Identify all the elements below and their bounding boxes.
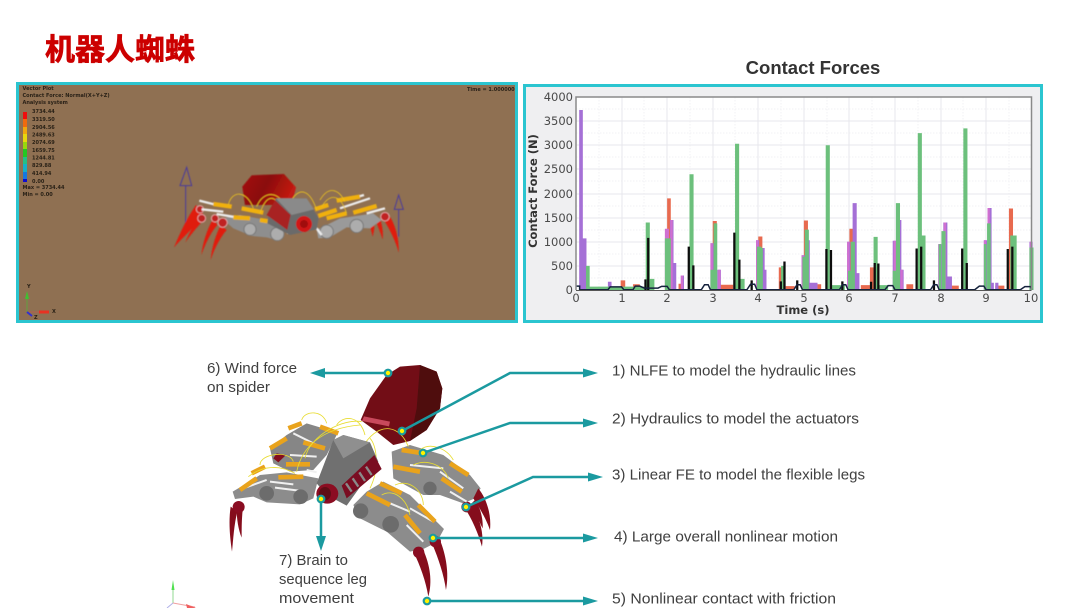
callout label 7: sequence leg <box>279 572 367 588</box>
arrow 7 brain <box>316 496 326 551</box>
front claws <box>413 540 447 597</box>
front leg gears <box>353 482 437 533</box>
right rear claws <box>464 488 490 547</box>
force series <box>576 110 1034 290</box>
x axis tick labels: 10 <box>1024 291 1038 305</box>
colour legend: 2489.63 <box>32 132 55 138</box>
x axis tick labels: 5 <box>800 291 808 305</box>
y axis tick labels: 3000 <box>544 138 573 152</box>
colour legend: 0.00 <box>32 179 45 185</box>
left foot <box>233 501 245 513</box>
x axis tick labels: 3 <box>709 291 717 305</box>
callout labels right: 2) Hydraulics to model the actuators <box>612 412 859 428</box>
left leg joints <box>259 486 308 504</box>
lower coordinate triad <box>167 580 196 608</box>
plot area <box>576 97 1032 290</box>
right rear leg mass <box>392 445 481 503</box>
vector plot header text: Time = 1.000000 <box>467 87 515 93</box>
spider model, annotated view <box>230 365 490 597</box>
abdomen <box>361 365 442 445</box>
black series <box>644 233 1013 290</box>
abdomen <box>242 174 296 205</box>
head top <box>276 198 314 215</box>
leg mass left <box>222 215 285 241</box>
arrow 2 actuators <box>420 418 598 456</box>
y axis tick labels: 0 <box>566 283 573 297</box>
callout labels right: 1) NLFE to model the hydraulic lines <box>612 364 856 380</box>
vector plot header text: Vector Plot <box>22 86 54 92</box>
chart frame <box>524 86 1042 322</box>
spider model, side view <box>174 167 403 260</box>
y axis tick labels: 3500 <box>544 114 573 128</box>
callout labels right <box>612 364 865 608</box>
callout label 7: 7) Brain to <box>279 553 348 569</box>
navy baseline trace <box>576 284 1032 290</box>
callout label 6 <box>207 361 297 396</box>
minor gridlines <box>576 97 1031 290</box>
chart heading: Contact Forces <box>746 57 880 78</box>
callout labels right: 4) Large overall nonlinear motion <box>614 530 838 546</box>
arrow 1 hydraulic lines <box>399 368 598 434</box>
x axis tick labels: 7 <box>891 291 899 305</box>
hydraulic lines <box>248 413 453 515</box>
x axis tick labels: 6 <box>845 291 853 305</box>
colour legend: Max = 3734.44 <box>22 185 65 191</box>
green series <box>586 128 1034 290</box>
front joints <box>413 536 441 558</box>
callout arrows <box>310 368 603 606</box>
hydraulic cylinders <box>213 197 377 223</box>
right front leg mass <box>353 482 444 552</box>
major gridlines <box>576 97 1031 290</box>
panel: contact forces chart <box>524 57 1042 322</box>
y axis tick labels: 1000 <box>544 235 573 249</box>
vector plot header text: Analysis system <box>22 100 68 106</box>
colour legend: 3319.50 <box>32 117 55 123</box>
x axis tick labels: 4 <box>754 291 762 305</box>
chart axes <box>576 97 1032 290</box>
colour legend: Min = 0.00 <box>22 192 53 198</box>
arrow 6 wind force <box>310 368 391 378</box>
right claws <box>368 217 399 253</box>
x axis tick labels: 1 <box>618 291 626 305</box>
x axis tick labels: 2 <box>663 291 671 305</box>
y axis tick labels: 4000 <box>544 90 573 104</box>
red series <box>621 198 1013 290</box>
colour legend: 2904.56 <box>32 125 55 131</box>
x axis tick labels: 8 <box>937 291 945 305</box>
rear left leg mass <box>270 423 337 472</box>
magenta series <box>665 208 1032 290</box>
head side plate <box>267 200 291 230</box>
leg mass right <box>317 213 382 238</box>
coordinate triad <box>25 284 56 321</box>
y axis tick labels <box>544 90 573 297</box>
y axis tick labels: 1500 <box>544 211 573 225</box>
arrow 5 contact friction <box>424 596 598 606</box>
callout label 7: movement <box>279 591 354 607</box>
brain disc centre <box>319 487 331 500</box>
head housing <box>267 198 319 235</box>
colour legend: 2074.69 <box>32 140 55 146</box>
x axis tick labels: 9 <box>982 291 990 305</box>
y axis tick labels: 500 <box>551 259 573 273</box>
x axis tick labels <box>572 291 1038 305</box>
colour legend: 829.88 <box>32 163 52 169</box>
colour legend: 1244.81 <box>32 156 55 162</box>
force arrow right <box>394 195 403 237</box>
white rods <box>199 195 385 235</box>
thorax red side <box>342 455 382 498</box>
joints <box>244 219 363 241</box>
arrow 4 nonlinear motion <box>430 534 598 542</box>
callout label 6: on spider <box>207 380 270 396</box>
thorax housing <box>317 435 378 506</box>
x axis title: Time (s) <box>777 303 829 317</box>
right foot <box>461 502 472 512</box>
x axis line <box>576 290 1032 292</box>
coordinate triad: Y <box>26 284 31 290</box>
red joints <box>196 206 389 227</box>
x axis tick labels: 0 <box>572 291 580 305</box>
left leg rods <box>245 433 317 491</box>
leg rods right <box>390 465 467 542</box>
brain disc <box>316 484 338 504</box>
brain disc <box>296 216 312 232</box>
hydraulic lines <box>228 190 347 213</box>
arrow 3 flexible legs <box>463 472 603 510</box>
colour legend <box>22 109 65 198</box>
colour legend: 414.94 <box>32 171 52 177</box>
force arrow left <box>180 167 192 225</box>
coordinate triad: X <box>52 309 56 315</box>
y axis tick labels: 2500 <box>544 162 573 176</box>
callout labels right: 3) Linear FE to model the flexible legs <box>612 468 865 484</box>
front left leg mass <box>233 472 318 504</box>
vector plot header text <box>22 86 515 106</box>
callout label 6: 6) Wind force <box>207 361 297 377</box>
left claws <box>230 453 286 552</box>
hydraulic cylinders <box>240 423 468 533</box>
colour legend: 3734.44 <box>32 109 55 115</box>
y axis title: Contact Force (N) <box>526 134 540 248</box>
callout labels right: 5) Nonlinear contact with friction <box>612 592 836 608</box>
colour legend: 1659.75 <box>32 148 55 154</box>
callout label 7 <box>279 553 367 607</box>
y axis tick labels: 2000 <box>544 187 573 201</box>
left claws <box>174 205 227 260</box>
abdomen band <box>362 416 390 426</box>
coordinate triad: Z <box>34 315 38 321</box>
abdomen shaded side <box>410 365 442 441</box>
title: 机器人蜘蛛 <box>45 34 195 67</box>
panel: vector plot simulation view <box>18 84 516 322</box>
thorax ribs <box>346 467 372 492</box>
vector plot header text: Contact Force: Normal(X+Y+Z) <box>22 93 110 99</box>
purple series <box>579 110 1033 290</box>
thorax top <box>333 435 370 458</box>
